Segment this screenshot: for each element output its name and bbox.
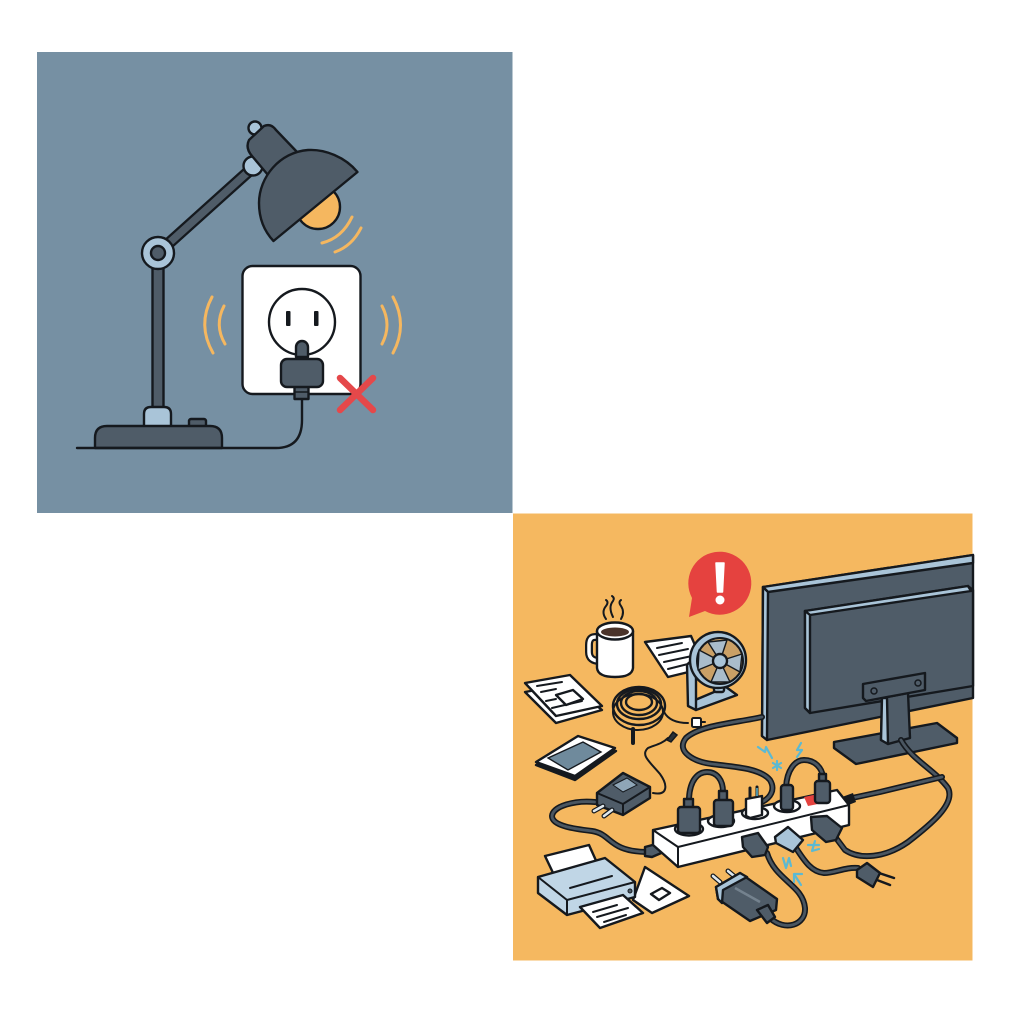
lamp neck [248,125,298,175]
loose plug [281,359,323,399]
looped plugs left [678,772,733,833]
monitor mount [863,673,925,701]
printer [538,845,689,928]
coffee mug [589,596,633,677]
outlet face [269,289,335,357]
looped plugs right [781,760,830,810]
tablet [536,736,616,780]
strip supply cable [842,777,942,806]
black cable loop to white plug [683,717,772,802]
lamp shade [259,150,358,241]
front grey plug and cable [775,827,894,887]
flicker waves [205,217,400,353]
printer body [538,858,635,915]
lamp switch [189,419,206,427]
coiled cable [613,687,705,743]
lamp base [95,426,222,448]
lamp collar [144,407,171,427]
lamp elbow joint [142,237,174,269]
wall charger [713,871,777,923]
panel: desk lamp and faulty outlet [37,52,512,513]
alert speech bubble [688,552,751,617]
power cord [77,398,302,448]
paper behind fan [645,636,705,677]
power strip [653,790,849,867]
lamp bulb [296,185,340,229]
monitor [762,555,973,764]
stacked papers [525,675,602,723]
monitor cable to front plug [836,740,949,856]
desk fan [687,632,746,710]
power adapter [594,773,650,816]
panel: cluttered desk with overloaded power strip [513,514,973,960]
red strip switch [804,794,823,806]
white plug [746,787,762,818]
wall outlet plate [242,266,360,394]
monitor neck [881,693,910,744]
front right plug [811,816,842,842]
lamp post [152,266,164,410]
thin adapter cable [645,732,677,794]
printer feed paper [545,845,598,877]
lamp arm [158,172,248,253]
monitor stand base [834,723,957,764]
electric sparks [758,743,819,885]
red cross [340,378,373,410]
side sheet of paper [633,867,689,913]
monitor back panel [805,586,973,713]
monitor housing [762,555,973,740]
lamp shade joint [244,156,262,176]
printer output paper [580,895,643,928]
lamp top knob [248,122,262,134]
front dark plug and charger cable [742,833,805,925]
strip sockets [675,800,800,836]
adapter cable to strip [552,802,666,857]
